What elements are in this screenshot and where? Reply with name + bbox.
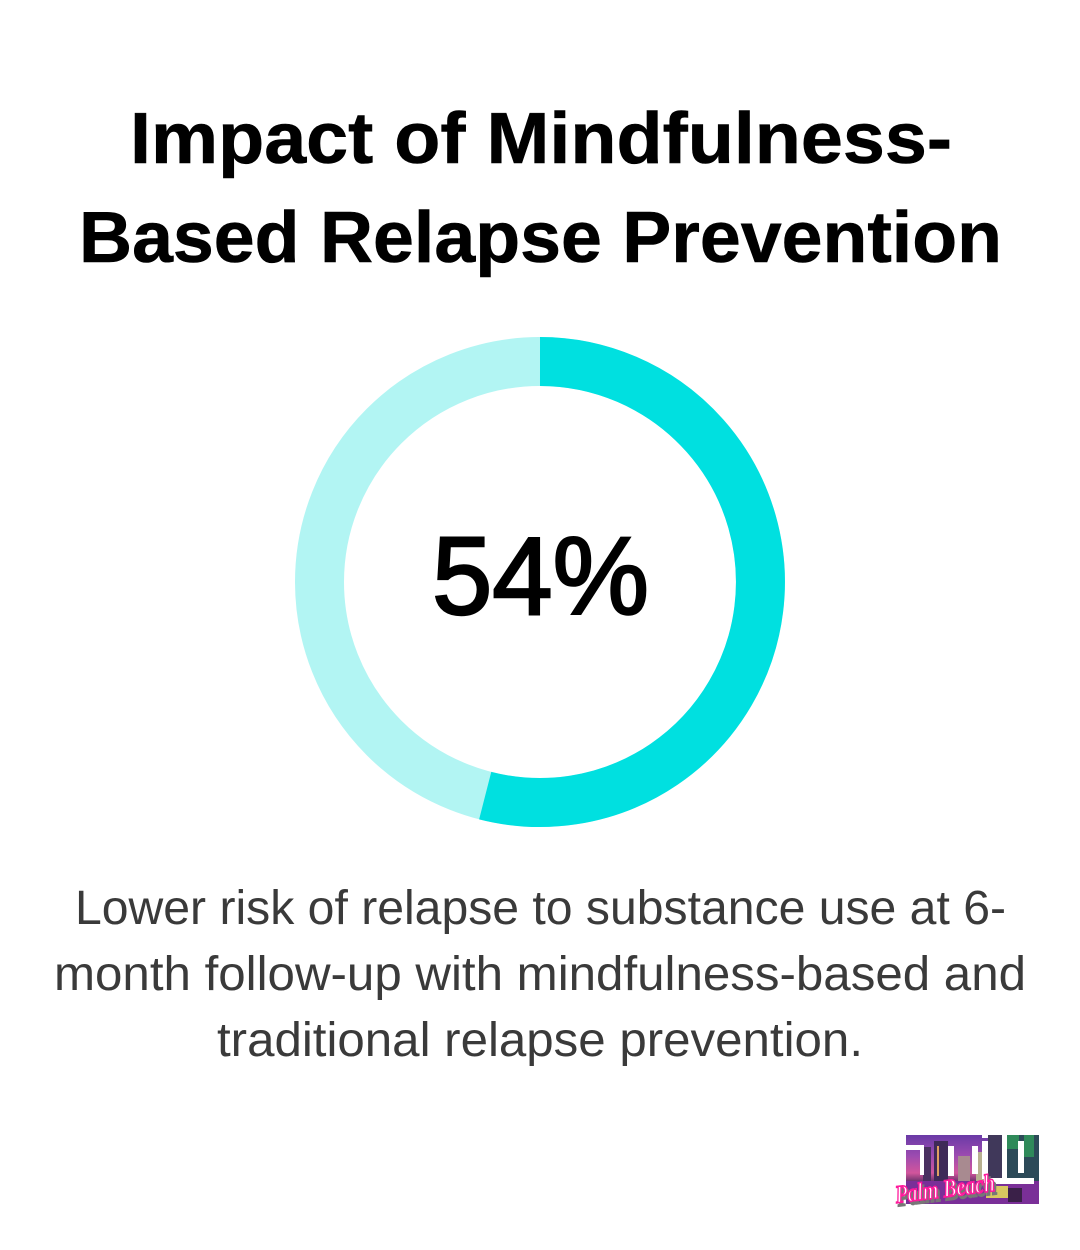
donut chart: 54% (320, 362, 760, 802)
logo: Amity Palm Beach (896, 1135, 1039, 1208)
title (79, 99, 1002, 278)
description text (54, 882, 1026, 1067)
title: Impact of Mindfulness- (130, 99, 952, 179)
value: 54%: 54% (432, 515, 649, 638)
description text: Lower risk of relapse to substance use at 6- (75, 882, 1006, 935)
logo: Amity Palm Beach: Palm Beach (893, 1170, 996, 1209)
logo: Amity Palm Beach: Palm Beach (895, 1173, 998, 1212)
description text: traditional relapse prevention. (217, 1014, 863, 1067)
title: Based Relapse Prevention (79, 198, 1002, 278)
description text: month follow-up with mindfulness-based and (54, 948, 1026, 1001)
